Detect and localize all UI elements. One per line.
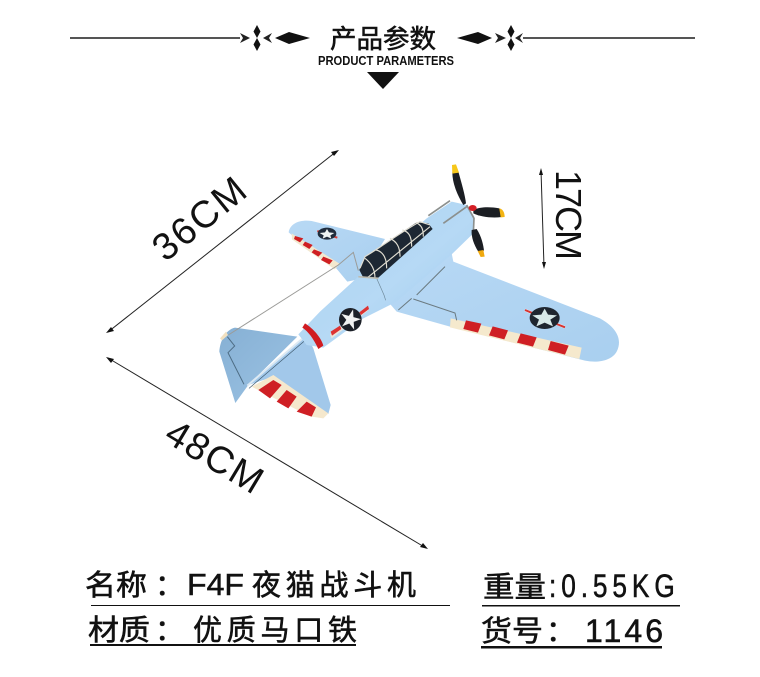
tail plane — [247, 335, 331, 418]
dimension: 48CM: 48CM — [158, 412, 270, 503]
spec: material: 材质 — [88, 614, 150, 647]
cockpit canopy — [358, 222, 433, 278]
spec: name: F4F — [187, 567, 244, 602]
spec: name: ： — [155, 570, 184, 602]
antenna wire — [228, 252, 358, 335]
spec: item number: 货号 — [481, 615, 543, 648]
airplane model — [219, 164, 619, 418]
engine details — [428, 201, 474, 233]
spec: weight: :0.55KG — [549, 570, 680, 605]
header right rule and ornament — [457, 25, 695, 51]
spec: material: ： — [155, 615, 184, 647]
spec: name: 名称 — [85, 569, 147, 602]
dimension: 17CM: 17CM — [548, 170, 589, 260]
dimension: 48CM — [106, 357, 428, 549]
spec: name: 夜猫战斗机 — [252, 569, 416, 602]
spec: material: 优质马口铁 — [193, 614, 357, 647]
header left rule and ornament — [70, 25, 310, 51]
dimension: 36CM — [106, 150, 339, 333]
spec: item number: ： — [546, 616, 575, 648]
spec: material — [88, 614, 357, 647]
tail fin — [219, 328, 297, 403]
fuselage — [298, 202, 474, 348]
header: product parameters — [70, 24, 695, 89]
spec: item number: 1146 — [585, 613, 663, 649]
header subtitle: PRODUCT PARAMETERS — [318, 53, 454, 68]
spec: name — [85, 567, 450, 606]
spec: weight: 重量 — [483, 571, 546, 604]
main wing — [387, 253, 619, 362]
far wing — [289, 221, 385, 282]
dimension: 36CM: 36CM — [145, 169, 255, 270]
header title: 产品参数 — [330, 24, 436, 54]
header down triangle — [367, 72, 399, 89]
propeller — [452, 164, 505, 257]
spec: item number — [481, 613, 663, 649]
red tail band — [302, 323, 323, 349]
spec: weight — [482, 570, 680, 606]
